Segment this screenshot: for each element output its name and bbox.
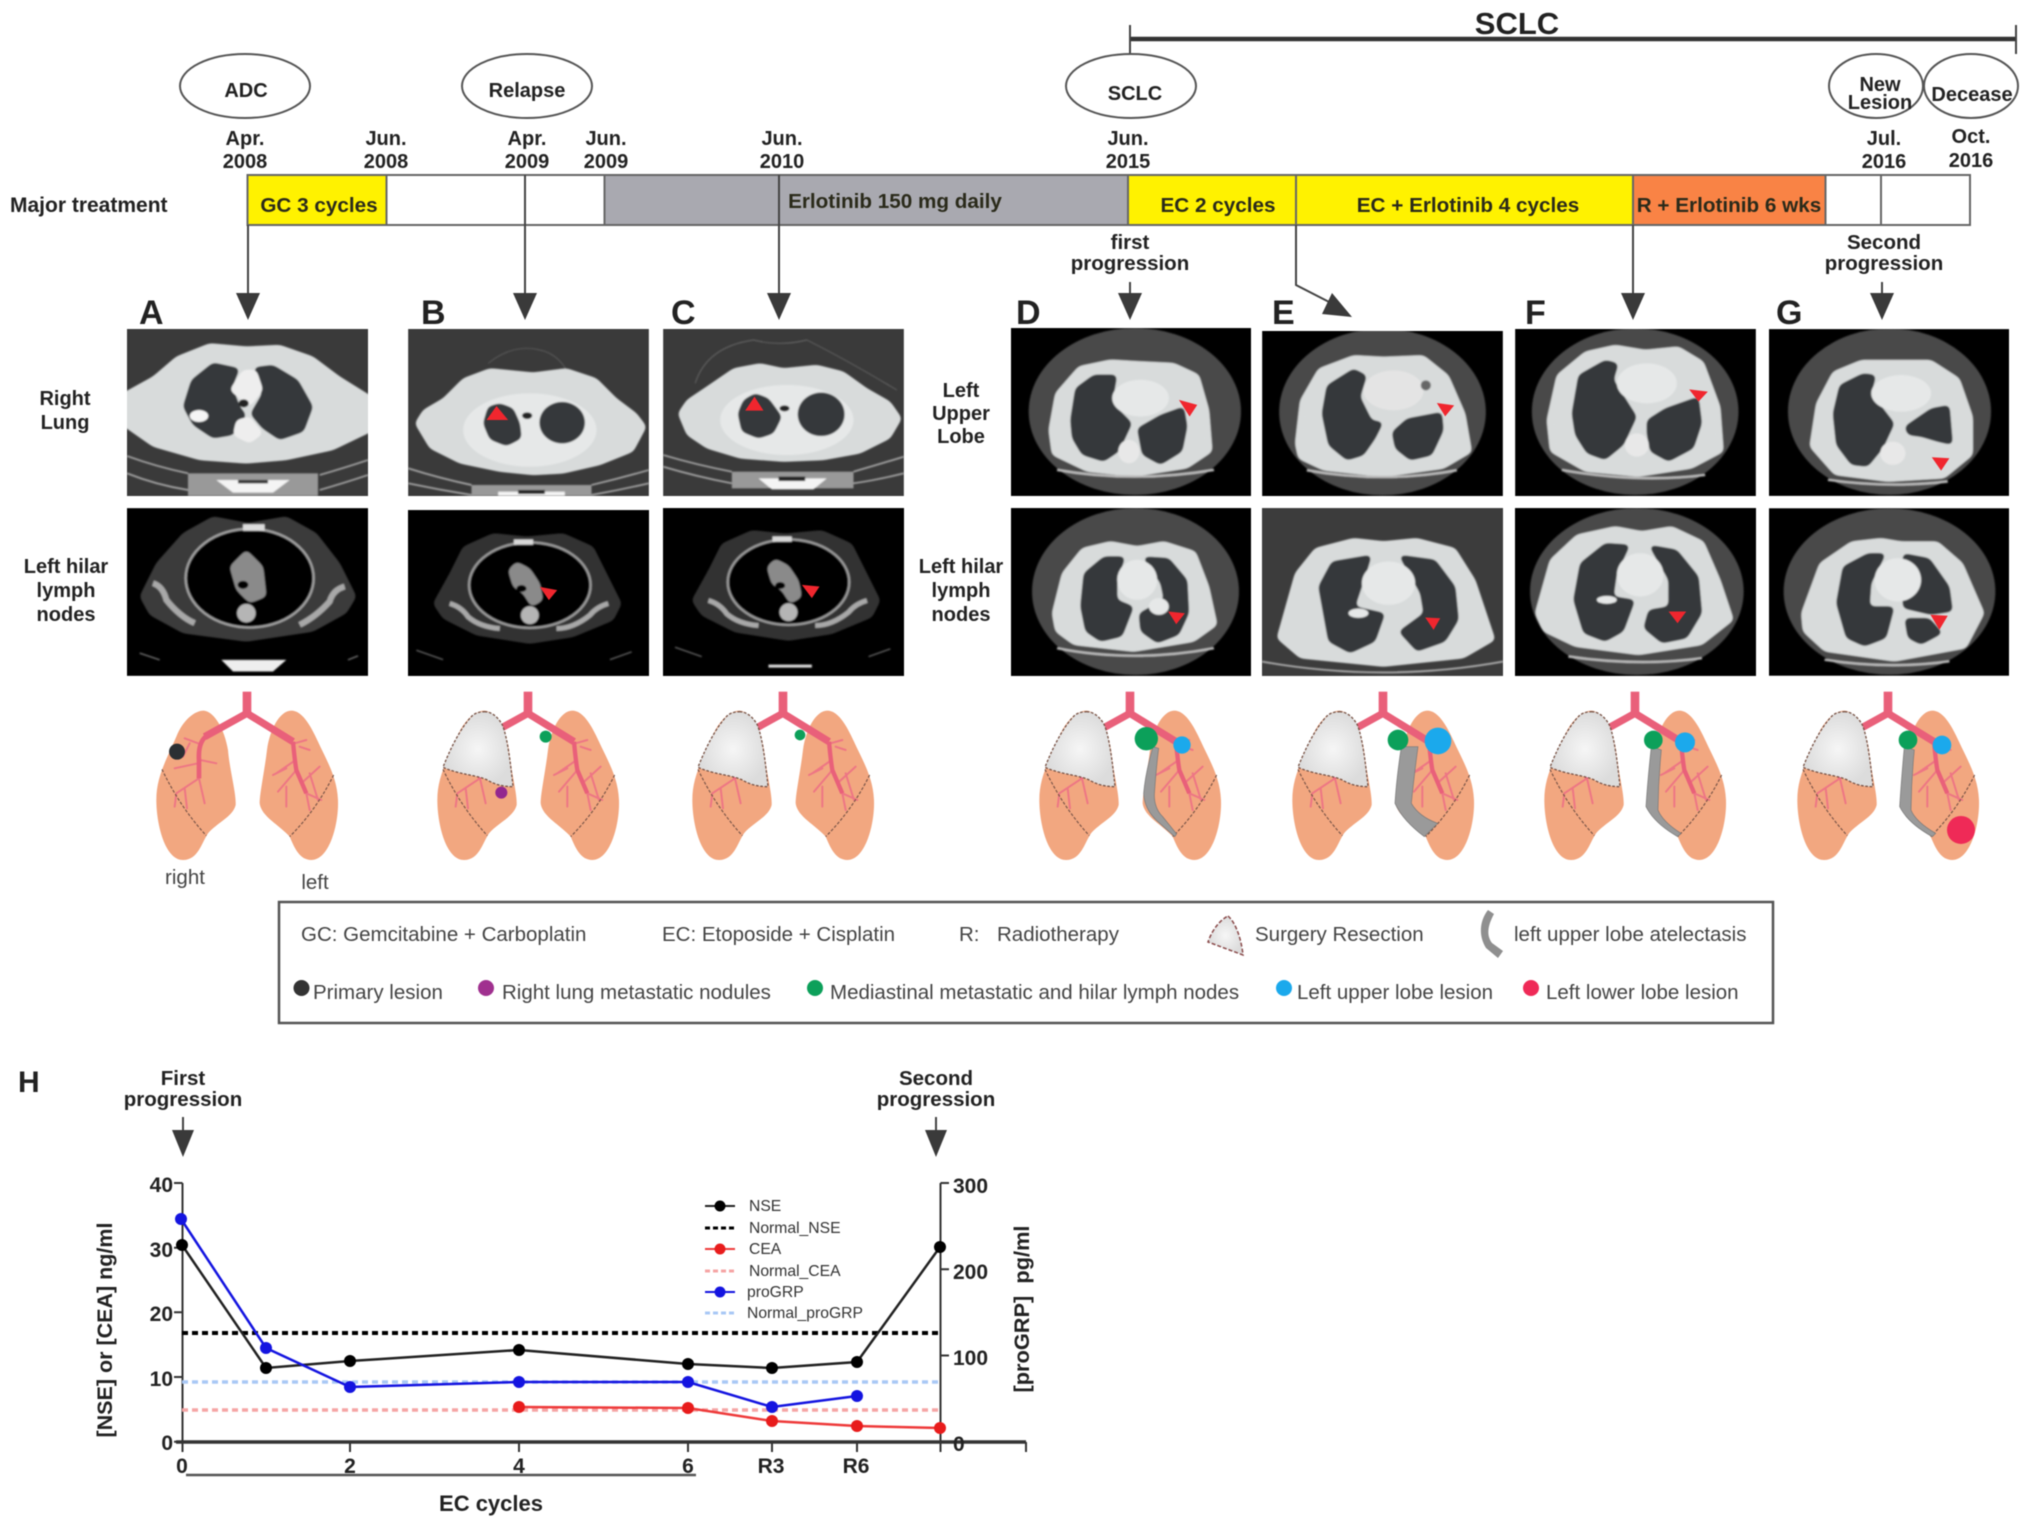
x axis labels: 0 (176, 1455, 188, 1478)
CT G top (1768, 328, 2010, 497)
right axis title: [proGRP] pg/ml (1011, 1226, 1034, 1392)
timeline dates: Oct. (1952, 126, 1990, 148)
icon: atelectasis (1481, 910, 1503, 958)
lung diagram E (1292, 692, 1474, 860)
row label: Left hilar lymph nodes (right): lymph (932, 580, 990, 602)
treatment bar: EC + Erlotinib 4 cycles (1357, 194, 1579, 217)
left axis numbers (150, 1174, 173, 1455)
abbreviations row: Radiotherapy (997, 923, 1120, 946)
row label: Right Lung: Lung (41, 412, 89, 434)
oval: New Lesion: Lesion (1848, 92, 1912, 114)
key: left upper lobe lesion: Left upper lobe lesion (1297, 981, 1493, 1004)
right axis numbers: 300 (953, 1175, 988, 1198)
axes (174, 1183, 1026, 1452)
right axis numbers: 100 (953, 1347, 988, 1370)
timeline dates: Jul. (1867, 128, 1901, 150)
row label: Left Upper Lobe (932, 380, 990, 448)
row label: Left hilar lymph nodes (right): nodes (932, 604, 990, 626)
oval: SCLC (1066, 54, 1196, 118)
timeline dates: Jun. (365, 128, 407, 150)
oval: New Lesion (1829, 54, 1923, 118)
oval: SCLC: SCLC (1108, 83, 1162, 105)
CT F bottom (1514, 507, 1757, 677)
SCLC span bracket (1130, 6, 2016, 54)
timeline dates: Jun. (585, 128, 627, 150)
oval: Decease (1924, 54, 2018, 118)
text: atelectasis: left upper lobe atelectasis (1514, 923, 1746, 946)
first progression text: first (1111, 231, 1150, 254)
row label: Left hilar lymph nodes (left): Left hilar (24, 556, 108, 578)
arrow to A (236, 225, 260, 320)
timeline dates (223, 126, 1993, 173)
left axis title: [NSE] or [CEA] ng/ml (94, 1222, 117, 1438)
row label: Left Upper Lobe: Left (943, 380, 980, 402)
CT E top (1261, 330, 1504, 497)
oval: New Lesion: New (1859, 74, 1901, 96)
label: right: right (165, 866, 205, 889)
lung diagram C (692, 692, 874, 860)
timeline dates: 2008 (223, 151, 267, 173)
oval: Decease: Decease (1931, 84, 2013, 106)
arrow to F (1621, 225, 1645, 320)
right axis numbers: 0 (953, 1433, 965, 1456)
right axis numbers: 200 (953, 1261, 988, 1284)
timeline dates: 2015 (1106, 151, 1150, 173)
panel letters: A (139, 294, 164, 332)
key: mediastinal nodes: Mediastinal metastatic and hilar lymph nodes (830, 981, 1239, 1004)
timeline dates: Jun. (761, 128, 803, 150)
CT G bottom (1768, 507, 2010, 677)
panel letters: F (1525, 294, 1546, 332)
timeline dates: 2009 (505, 151, 549, 173)
proGRP series (175, 1213, 863, 1413)
left axis numbers: 10 (150, 1368, 173, 1391)
x axis labels: 6 (682, 1455, 694, 1478)
first progression text (1071, 231, 1189, 275)
row label: Left hilar lymph nodes (right) (919, 556, 1003, 626)
First progression label and arrow (124, 1067, 242, 1157)
CT A top (126, 328, 369, 497)
timeline dates: 2008 (364, 151, 408, 173)
normal reference lines (182, 1333, 940, 1410)
key: left lower lobe lesion: Left lower lobe lesion (1546, 981, 1739, 1004)
CT B top (407, 328, 650, 497)
lung diagram A (156, 692, 338, 860)
timeline dates: Apr. (226, 128, 264, 150)
lung diagram D (1039, 692, 1221, 860)
left axis numbers: 0 (161, 1432, 173, 1455)
arrow to E (1296, 225, 1352, 317)
second progression text (1825, 231, 1943, 275)
CEA series (513, 1401, 946, 1434)
timeline dates: 2016 (1949, 150, 1993, 172)
CT F top (1514, 328, 1757, 497)
row label: Left Upper Lobe: Upper (932, 403, 990, 425)
CT C bottom (662, 507, 905, 677)
second progression text: progression (1825, 252, 1943, 275)
panel letters: E (1272, 294, 1295, 332)
second progression text: Second (1847, 231, 1921, 254)
text: surgery resection: Surgery Resection (1255, 923, 1424, 946)
chart legend: CEA (749, 1241, 782, 1258)
row label: Right Lung (39, 388, 91, 434)
NSE series (176, 1239, 946, 1374)
lung diagram B (437, 692, 619, 860)
lung diagram G (1797, 692, 1979, 860)
timeline dates: 2016 (1862, 151, 1906, 173)
row label: Left hilar lymph nodes (left) (24, 556, 108, 626)
label: Major treatment: Major treatment (10, 194, 168, 217)
row label: Left hilar lymph nodes (left): lymph (37, 580, 95, 602)
treatment bar (248, 175, 1970, 225)
treatment bar: Erlotinib 150 mg daily (788, 190, 1002, 213)
right axis numbers (953, 1175, 988, 1456)
panel letters: G (1776, 294, 1802, 332)
first progression text: progression (1071, 252, 1189, 275)
oval: Relapse: Relapse (489, 80, 565, 102)
Second progression label and arrow (877, 1067, 995, 1157)
x axis labels: R3 (758, 1455, 784, 1478)
EC cycles bracket: EC cycles (439, 1491, 543, 1516)
abbreviations row: GC: Gemcitabine + Carboplatin (301, 923, 586, 946)
chart legend: Normal_NSE (749, 1220, 841, 1237)
row label: Left hilar lymph nodes (left): nodes (37, 604, 95, 626)
icon: surgery resection (1208, 916, 1243, 955)
chart legend: proGRP (747, 1284, 804, 1301)
x axis labels: 2 (344, 1455, 356, 1478)
arrow to D (1118, 282, 1142, 320)
line chart (94, 1174, 1034, 1516)
SCLC span bracket: SCLC (1475, 6, 1559, 41)
left axis numbers: 20 (150, 1303, 173, 1326)
CT D top (1010, 327, 1252, 497)
chart legend (705, 1198, 863, 1322)
CT B bottom (407, 509, 650, 677)
key: primary lesion: Primary lesion (313, 981, 443, 1004)
left axis numbers: 40 (150, 1174, 173, 1197)
chart legend: Normal_proGRP (747, 1305, 863, 1322)
panel letters (139, 294, 1802, 332)
First progression label and arrow: First (161, 1067, 205, 1090)
panel letters: B (421, 294, 446, 332)
panel letters: C (671, 294, 696, 332)
CT D bottom (1010, 507, 1252, 677)
arrow to B (513, 175, 537, 320)
Second progression label and arrow: progression (877, 1088, 995, 1111)
lung diagram F (1544, 692, 1726, 860)
legend panel (279, 902, 1773, 1023)
row label: Left Upper Lobe: Lobe (937, 426, 985, 448)
oval: ADC: ADC (224, 80, 268, 102)
chart legend: Normal_CEA (749, 1263, 841, 1280)
oval: ADC (180, 54, 310, 118)
abbreviations row: EC: Etoposide + Cisplatin (662, 923, 895, 946)
arrow to G (1870, 282, 1894, 320)
timeline dates: 2010 (760, 151, 804, 173)
x axis labels (176, 1455, 869, 1478)
x axis labels: 4 (513, 1455, 525, 1478)
timeline dates: Jun. (1107, 128, 1149, 150)
treatment bar: R + Erlotinib 6 wks (1637, 194, 1821, 217)
CT A bottom (126, 507, 369, 677)
timeline dates: Apr. (508, 128, 546, 150)
CT E bottom (1261, 507, 1504, 677)
left axis numbers: 30 (150, 1239, 173, 1262)
First progression label and arrow: progression (124, 1088, 242, 1111)
key: right lung nodules: Right lung metastatic nodules (502, 981, 771, 1004)
Second progression label and arrow: Second (899, 1067, 973, 1090)
label: left: left (301, 871, 329, 894)
timeline dates: 2009 (584, 151, 628, 173)
panel letters: D (1016, 294, 1041, 332)
row label: Right Lung: Right (39, 388, 91, 410)
panel letter H: H (18, 1066, 40, 1099)
oval: Relapse (462, 54, 592, 118)
row label: Left hilar lymph nodes (right): Left hilar (919, 556, 1003, 578)
CT C top (662, 328, 905, 497)
x axis labels: R6 (843, 1455, 869, 1478)
arrow to C (767, 175, 791, 320)
abbreviations row (301, 923, 1120, 946)
abbreviations row: R: (959, 923, 980, 946)
chart legend: NSE (749, 1198, 781, 1215)
treatment bar: EC 2 cycles (1160, 194, 1276, 217)
treatment bar: GC 3 cycles (260, 194, 378, 217)
